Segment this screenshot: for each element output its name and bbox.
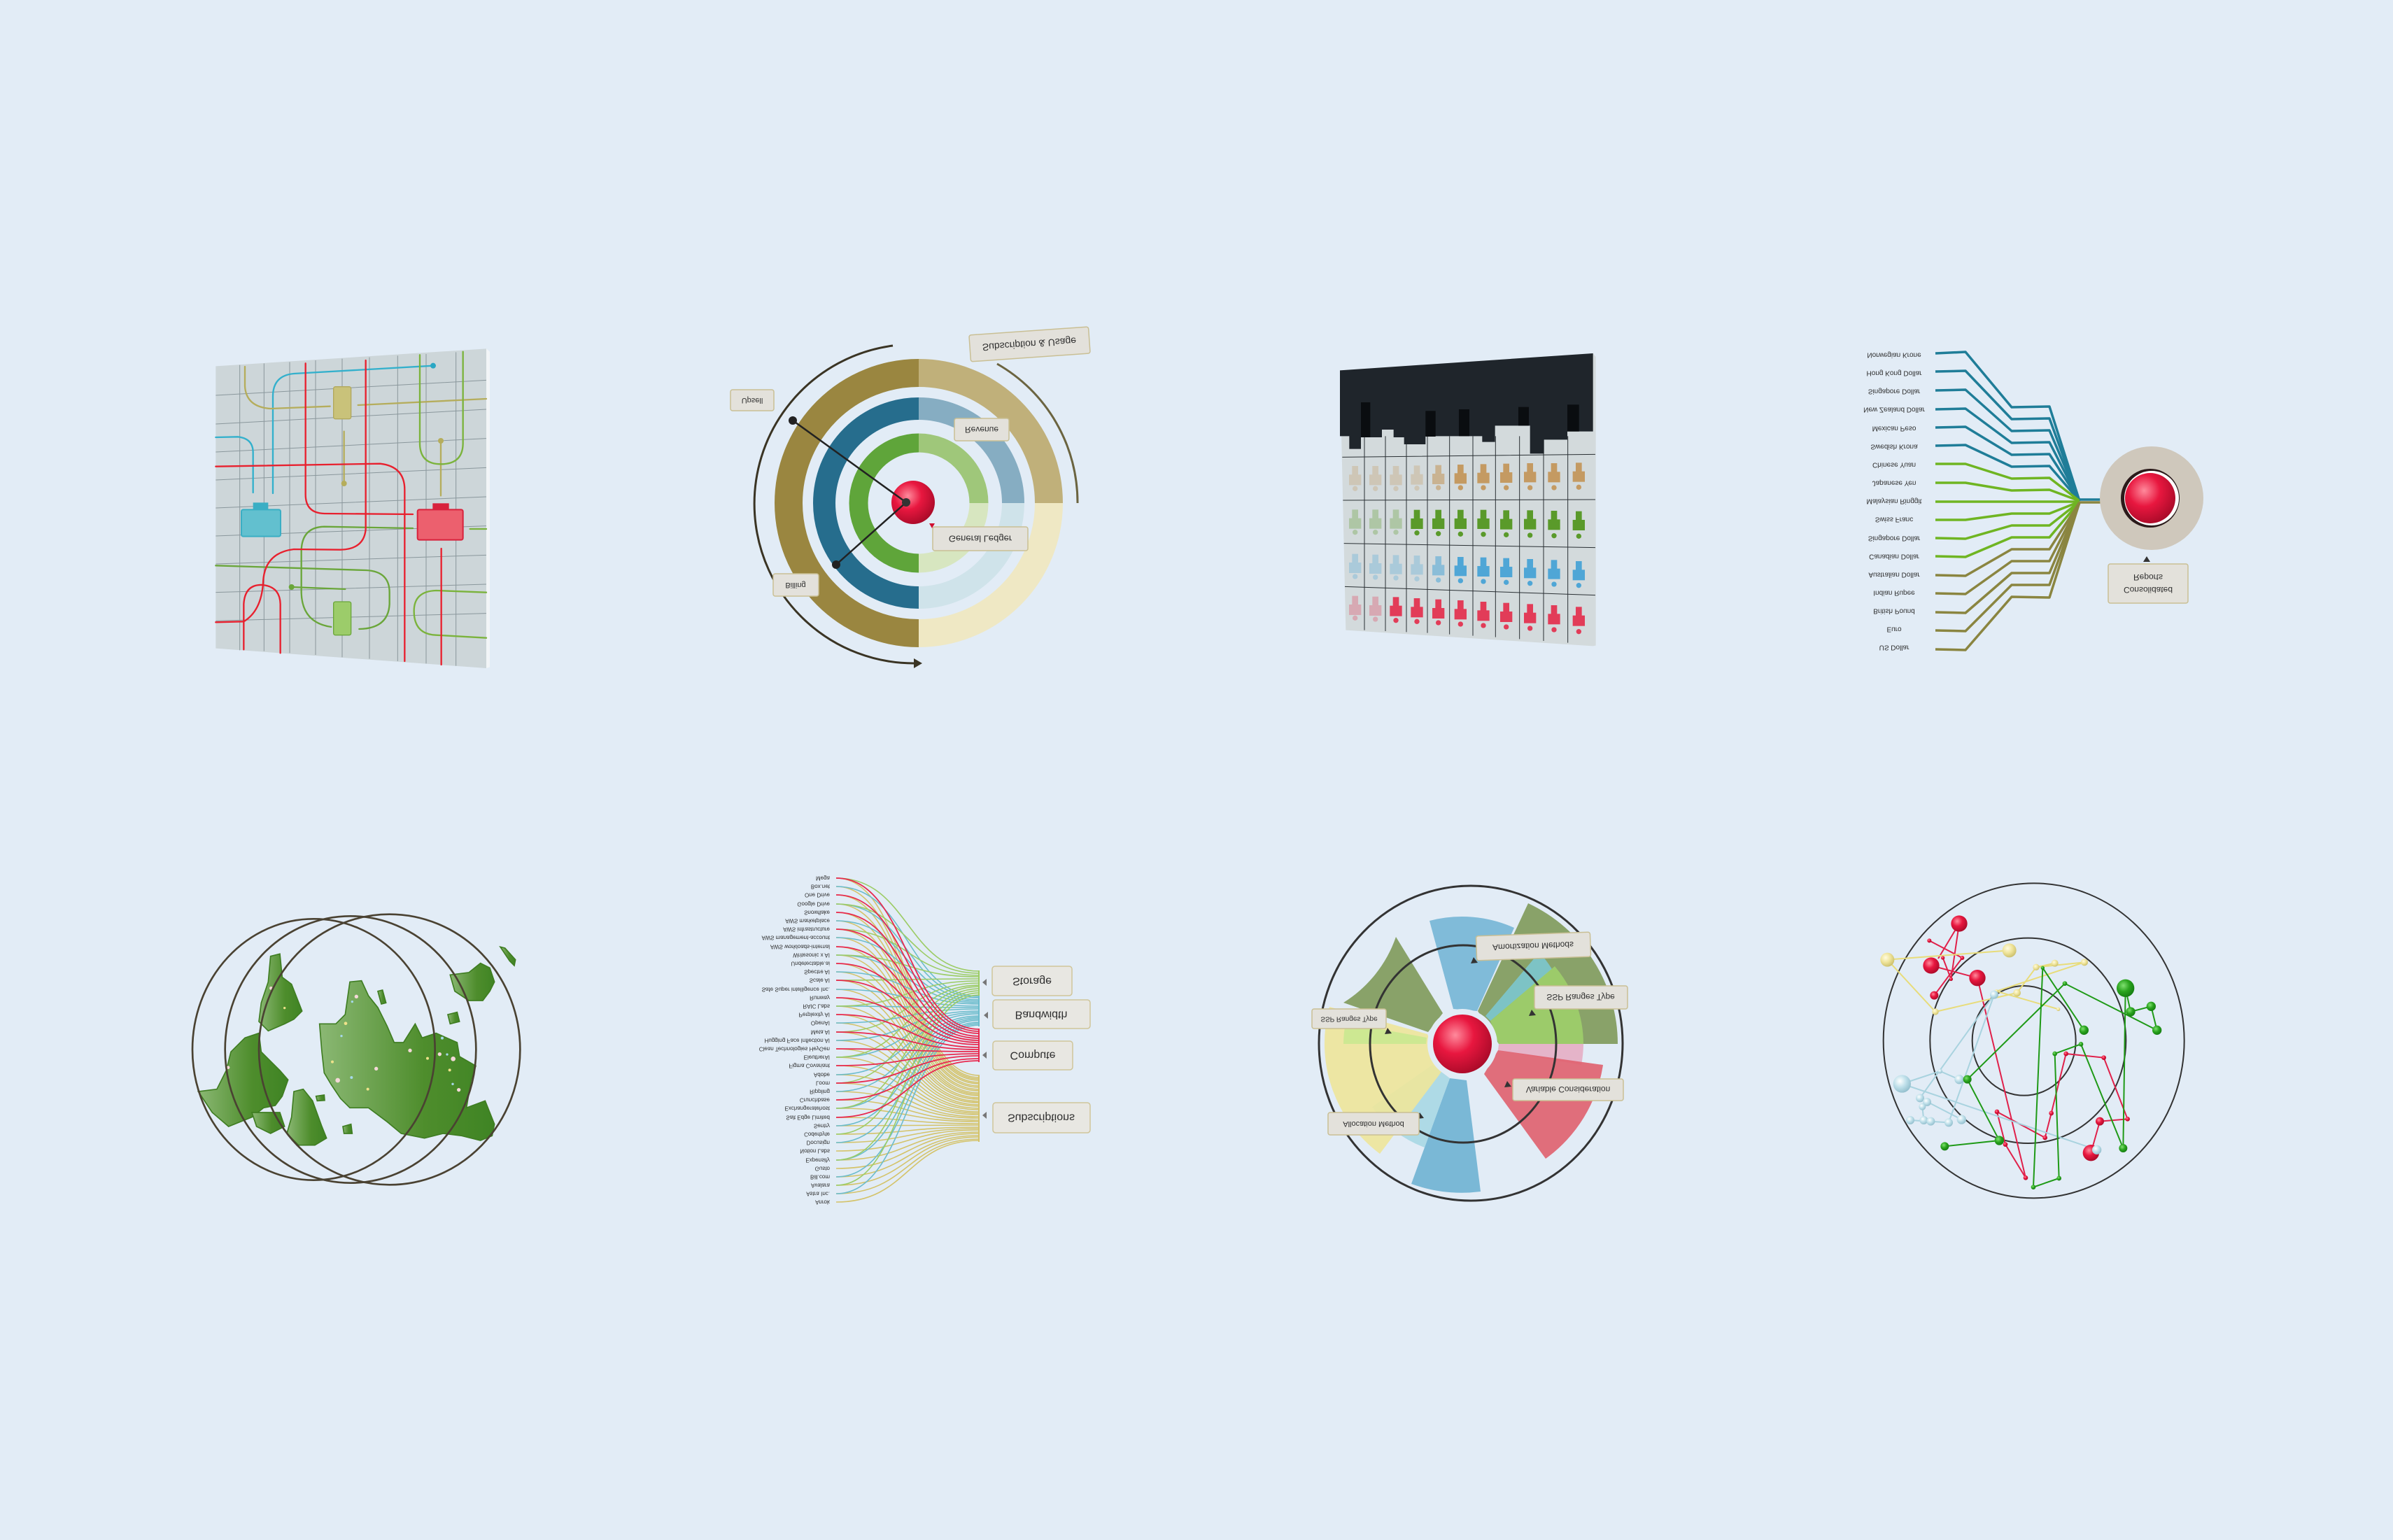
label: Compute: Compute — [1010, 1050, 1056, 1061]
label: Billing — [773, 574, 819, 596]
panel: sankey flows — [759, 875, 1090, 1205]
source labels: Runway — [810, 995, 830, 1001]
panel: network graph in circles — [1880, 883, 2184, 1198]
currency labels: Australian Dollar — [1868, 571, 1920, 578]
source labels: Rippling — [810, 1089, 830, 1094]
outer arc with arrow — [754, 346, 914, 663]
label: Consolidated Reports — [2108, 564, 2188, 603]
flows: storage — [836, 878, 980, 1185]
source labels: Writesonic x AI — [793, 952, 830, 959]
panel: circuit board — [216, 348, 490, 668]
label: Subscription & Usage: Subscription & Usage — [982, 335, 1077, 353]
currency labels: US Dollar — [1879, 644, 1910, 651]
source labels: Coderbyte — [804, 1131, 831, 1138]
label: SSP Ranges Type (right) — [1534, 986, 1628, 1009]
source labels: Undetectable.ai — [791, 960, 830, 967]
pegs tan row — [1349, 462, 1585, 491]
red core — [1433, 1015, 1492, 1073]
label: Variable Consideration — [1513, 1079, 1623, 1101]
icon: olive module — [334, 387, 351, 419]
red core — [891, 481, 935, 524]
source labels: Snowflake — [804, 910, 831, 915]
pegs blue row — [1349, 554, 1585, 588]
nodes — [1923, 915, 2130, 1180]
currency labels: Norwegian Krone — [1867, 351, 1921, 358]
source labels: Avalara — [811, 1182, 831, 1188]
target bands — [978, 970, 980, 1142]
currency labels — [1863, 351, 1926, 651]
currency labels: Singapore Dollar — [1868, 535, 1921, 542]
label: Consolidated Reports: Reports — [2133, 572, 2163, 582]
currency lines — [1935, 352, 2107, 650]
label: General Ledger: General Ledger — [949, 533, 1012, 544]
label: SSP Ranges Type (left): SSP Ranges Type — [1320, 1015, 1378, 1023]
panel: key grid — [1340, 353, 1596, 646]
label: Allocation Method — [1328, 1112, 1419, 1135]
source labels: Sentry — [814, 1122, 830, 1129]
label: Subscriptions: Subscriptions — [1008, 1111, 1075, 1124]
currency labels: Malaysian Ringgit — [1867, 497, 1922, 505]
edges — [1887, 924, 2157, 1187]
source labels: Loom — [816, 1080, 830, 1086]
label: Bandwidth — [993, 1000, 1090, 1029]
label: Variable Consideration: Variable Consideration — [1526, 1085, 1610, 1094]
currency labels: Swiss Franc — [1875, 515, 1913, 523]
source labels: Docusign — [807, 1139, 830, 1146]
flows: bandwidth — [836, 886, 980, 1194]
source labels: EleutherAI — [804, 1054, 830, 1061]
source labels: Bill.com — [810, 1174, 830, 1180]
source labels: Hugging Face Inflection AI — [765, 1037, 830, 1044]
source labels: Notion Labs — [800, 1147, 830, 1154]
source labels: Figma Covariant — [789, 1062, 831, 1069]
label: Amortization Methods — [1476, 932, 1591, 961]
currency labels: Indian Rupee — [1873, 589, 1915, 596]
label: Allocation Method: Allocation Method — [1343, 1119, 1404, 1128]
icon: red module — [418, 503, 463, 540]
currency labels: Swedish Krona — [1870, 442, 1918, 451]
red tracks — [306, 363, 413, 514]
currency labels: Canadian Dollar — [1869, 553, 1920, 560]
source labels: Safe Super intelligence Inc. — [762, 987, 830, 992]
overlapping circles — [192, 914, 520, 1185]
source labels: One Drive — [805, 891, 831, 898]
connectors — [793, 421, 906, 565]
source labels: AWS management-account — [761, 935, 831, 940]
green tracks — [420, 352, 463, 464]
icon: cyan module — [241, 502, 281, 537]
rings — [1319, 886, 1623, 1201]
source labels: AWS infrastructure — [783, 926, 831, 932]
currency labels: New Zealand Dollar — [1863, 406, 1926, 413]
flows: subscriptions — [836, 878, 980, 1202]
icon: red button on platter — [2100, 446, 2203, 550]
source labels: Exchangeratehost — [785, 1105, 831, 1111]
gold ring — [789, 373, 919, 633]
icon: green module — [334, 602, 351, 635]
cyan tracks — [273, 366, 433, 493]
currency labels: Mexican Peso — [1872, 424, 1916, 432]
panel: world map with circles — [192, 914, 520, 1185]
source labels: Astra Inc. — [806, 1191, 830, 1196]
label: General Ledger — [933, 527, 1028, 551]
label: SSP Ranges Type (left) — [1312, 1009, 1386, 1029]
label: Consolidated Reports: Consolidated — [2124, 585, 2173, 595]
label: Compute — [993, 1041, 1073, 1070]
currency labels: Singapore Dollar — [1868, 388, 1921, 395]
source labels: Google Drive — [797, 901, 831, 907]
source labels: Perplexity AI — [799, 1012, 830, 1017]
label: Bandwidth: Bandwidth — [1015, 1009, 1067, 1020]
wedges — [1430, 917, 1514, 1011]
source labels: Adobe — [814, 1072, 831, 1078]
currency labels: Japanese Yen — [1872, 479, 1916, 487]
pegs green row — [1349, 509, 1585, 539]
source labels: Anrok — [815, 1199, 831, 1205]
panel: radial wedge chart — [1312, 886, 1628, 1201]
source labels: Scale AI — [810, 977, 830, 984]
source labels: Box.net — [811, 883, 831, 890]
currency labels: British Pound — [1873, 607, 1915, 614]
currency labels: Chinese Yuan — [1872, 460, 1916, 469]
source labels: Expensify — [805, 1157, 830, 1163]
source labels: Spectre AI — [804, 968, 830, 975]
green ring — [859, 443, 919, 563]
source labels: Meta AI — [811, 1029, 830, 1036]
label: SSP Ranges Type (right): SSP Ranges Type — [1546, 992, 1615, 1002]
label: Revenue: Revenue — [965, 425, 998, 435]
source labels — [759, 875, 831, 1205]
source labels: Salt Edge Limited — [786, 1114, 830, 1121]
source labels: RAIC Labs — [803, 1003, 830, 1009]
source labels: AWS marketplace — [785, 918, 831, 924]
olive tracks — [245, 367, 330, 409]
source labels: Mega — [816, 875, 831, 882]
label: Upsell: Upsell — [742, 396, 763, 404]
source labels: Clean Technologies HeyGen — [759, 1045, 830, 1052]
label: Billing: Billing — [785, 581, 806, 589]
label: Revenue — [954, 418, 1009, 441]
label: Storage — [992, 966, 1072, 996]
flows: compute — [836, 878, 980, 1117]
panel: currency consolidation — [1863, 351, 2203, 651]
label: Upsell — [730, 390, 774, 411]
source labels: OpenAI — [811, 1020, 830, 1026]
blue ring — [824, 409, 919, 598]
label: Subscriptions — [993, 1103, 1090, 1133]
source labels: AWS workloads-internal — [770, 943, 830, 950]
label: Storage: Storage — [1012, 975, 1052, 987]
label: Subscription & Usage — [969, 327, 1090, 362]
source labels: Crunchbase — [800, 1097, 831, 1103]
source labels: Gusto — [815, 1166, 831, 1171]
panel: concentric revenue rings — [730, 327, 1090, 668]
currency labels: Euro — [1886, 626, 1902, 633]
pegs red row — [1349, 596, 1585, 634]
label: Amortization Methods: Amortization Methods — [1492, 940, 1574, 952]
currency labels: Hong Kong Dollar — [1867, 369, 1922, 376]
